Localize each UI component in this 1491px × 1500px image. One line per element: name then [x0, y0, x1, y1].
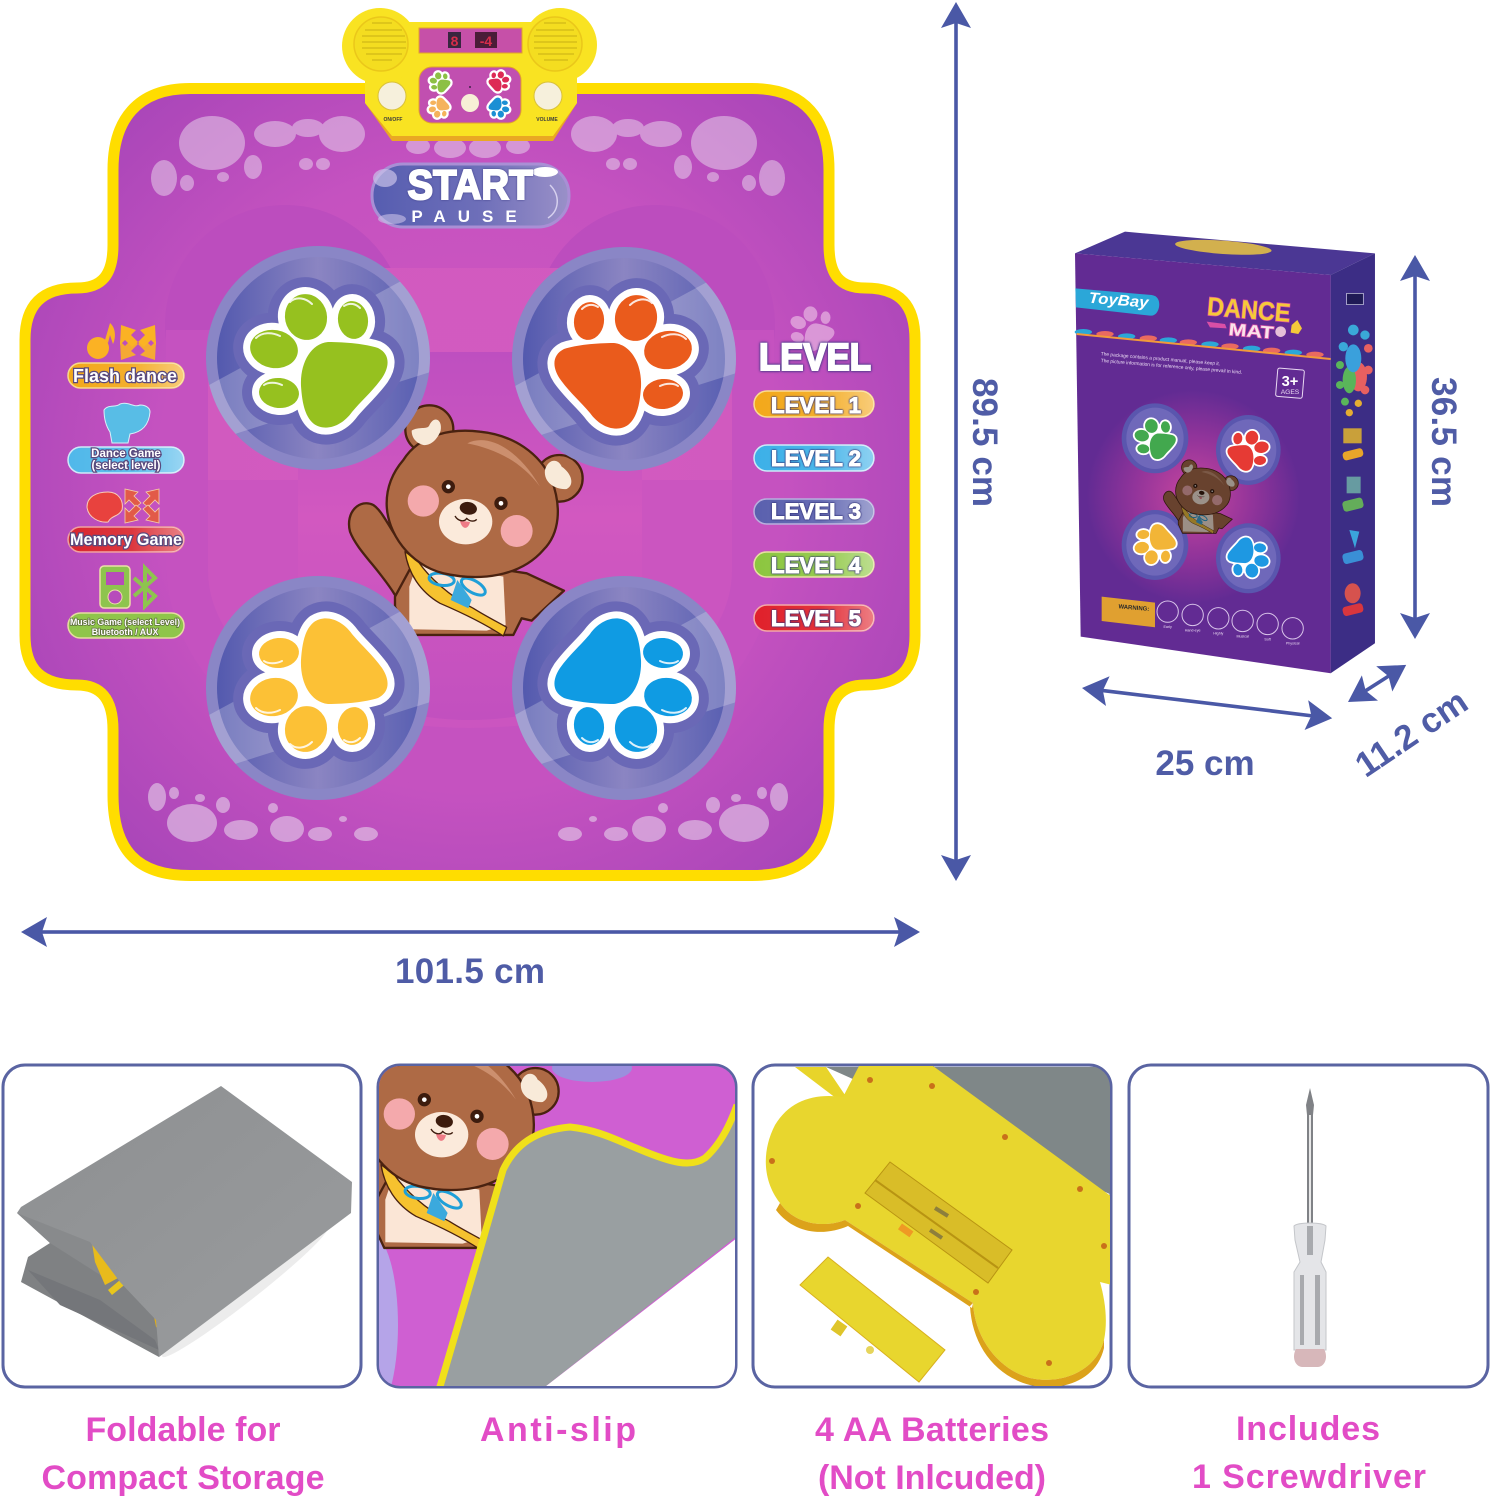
bear mascot [349, 405, 583, 636]
start pause button: PAUSE [411, 207, 529, 226]
package notice [1100, 351, 1242, 376]
icon: note and orange arrows [87, 323, 156, 360]
pill: music game: Music Game (select Level) [70, 617, 180, 627]
bear crop [379, 1066, 560, 1250]
pill: flash dance: Flash dance [73, 366, 177, 386]
warning label [1102, 597, 1155, 627]
caption: foldable: Foldable for [86, 1411, 280, 1449]
caption: anti-slip: Anti-slip [480, 1411, 636, 1449]
arrow: box height [1400, 255, 1430, 639]
start pause button [372, 161, 569, 227]
pill: dance game: (select level) [91, 460, 161, 472]
decorative bubbles top [151, 116, 785, 196]
toybay logo pill: ToyBay [1088, 290, 1151, 312]
icon: bluetooth [134, 568, 155, 606]
icon: brain [87, 492, 122, 522]
white floor corner [541, 1238, 737, 1390]
background arcs [165, 205, 775, 787]
warning label: WARNING: [1118, 604, 1149, 613]
age badge: 3+ [1282, 374, 1298, 390]
caption: screwdriver: Includes [1236, 1410, 1380, 1448]
box front [1075, 253, 1331, 673]
grey mat behind [826, 1067, 1112, 1195]
box bear [1164, 460, 1238, 534]
caption: foldable [42, 1411, 324, 1497]
panel: anti-slip [376, 1064, 738, 1388]
pill: music game [68, 613, 184, 638]
panel: batteries [753, 1065, 1112, 1387]
yellow mat edge [439, 1105, 737, 1390]
arrow: box width [1080, 673, 1334, 733]
display panel: -4 [480, 33, 492, 49]
feature icons: Early [1163, 625, 1172, 629]
caption: screwdriver [1192, 1410, 1426, 1496]
controller back [766, 1066, 1112, 1380]
feature icons: Highly [1213, 632, 1224, 636]
arrow: mat height [941, 2, 971, 881]
on/off knob [378, 82, 406, 110]
pill: level 4: LEVEL 4 [771, 553, 862, 578]
icon: music player [100, 566, 130, 608]
panel: foldable [3, 1065, 361, 1387]
feature icons: Physical [1286, 642, 1300, 646]
feature icons: Musical [1236, 634, 1249, 638]
screw holes [769, 1077, 1107, 1366]
caption: batteries: 4 AA Batteries [815, 1411, 1049, 1449]
pill: music game: Bluetooth / AUX [92, 627, 158, 637]
dance mat logo: MAT [1228, 319, 1275, 343]
caption: batteries [815, 1411, 1049, 1497]
screwdriver [1294, 1088, 1326, 1367]
pill: dance game [68, 447, 184, 473]
pill: level 1 [754, 391, 874, 418]
paw button: blue [504, 576, 749, 800]
knob labels: VOLUME [536, 117, 558, 123]
pill: level 3: LEVEL 3 [771, 499, 861, 524]
label: box depth: 11.2 cm [1348, 682, 1475, 785]
pill: level 1: LEVEL 1 [771, 393, 861, 418]
start pause button: START [408, 161, 533, 208]
box paw: green [1122, 403, 1188, 473]
icon: fist [104, 403, 150, 443]
paw button: yellow [198, 576, 443, 800]
speaker left [342, 8, 418, 84]
pink mat [378, 1065, 736, 1387]
caption: foldable: Compact Storage [42, 1459, 324, 1497]
small paw print [785, 302, 838, 355]
age badge: AGES [1281, 389, 1300, 396]
controller unit [342, 8, 597, 141]
battery compartment [865, 1162, 1012, 1283]
battery cover [800, 1257, 945, 1382]
package notice: The package contains a product manual, please keep it. [1100, 351, 1220, 367]
game mode menu [68, 323, 184, 638]
label: box height: 36.5 cm [1424, 377, 1463, 507]
panel: screwdriver [1129, 1065, 1488, 1387]
folded mat [17, 1086, 352, 1365]
caption: screwdriver: 1 Screwdriver [1192, 1458, 1426, 1496]
level heading: LEVEL [759, 337, 871, 379]
display panel: 8 [451, 33, 459, 49]
box side [1331, 253, 1375, 673]
pill: level 5: LEVEL 5 [771, 606, 861, 631]
controller body [365, 22, 577, 141]
level menu [754, 302, 874, 631]
mat body with yellow border [25, 88, 915, 876]
caption: batteries: (Not Inlcuded) [818, 1459, 1046, 1497]
feature icons: Soft [1264, 638, 1271, 642]
grey underside [439, 1105, 737, 1390]
mini paw pad [419, 67, 521, 123]
label: mat height: 89.5 cm [965, 378, 1004, 507]
package notice: The picture information is for reference only, please prevail in kind. [1100, 358, 1242, 376]
coloured stripe [1075, 329, 1331, 359]
label: box width: 25 cm [1155, 744, 1255, 783]
pill: memory game: Memory Game [70, 531, 182, 549]
arrow: box depth [1340, 652, 1414, 715]
feature icons [1157, 601, 1303, 646]
toybay logo pill [1075, 288, 1159, 316]
label: mat width: 101.5 cm [395, 952, 545, 991]
feature icons: Hand-eye [1185, 628, 1201, 632]
volume knob [534, 82, 562, 110]
pill: dance game: Dance Game [91, 448, 161, 460]
decorative paw prints bottom [148, 783, 788, 842]
paw button: green [198, 246, 443, 470]
box paw: blue [1216, 523, 1281, 593]
icon: red arrows [125, 489, 159, 523]
box paw: red [1216, 415, 1281, 485]
arrow: mat width [21, 917, 920, 947]
dance mat logo: DANCE [1206, 291, 1292, 328]
age badge [1276, 368, 1304, 398]
knob labels [384, 117, 558, 123]
box top [1075, 232, 1375, 275]
pill: level 2: LEVEL 2 [771, 446, 861, 471]
dance mat [25, 8, 915, 876]
product box [1075, 232, 1375, 673]
paw button: red [504, 247, 749, 471]
box paw: yellow [1122, 510, 1188, 580]
knob labels: ON/OFF [384, 117, 402, 123]
display panel [419, 28, 522, 53]
speaker right [523, 8, 597, 82]
